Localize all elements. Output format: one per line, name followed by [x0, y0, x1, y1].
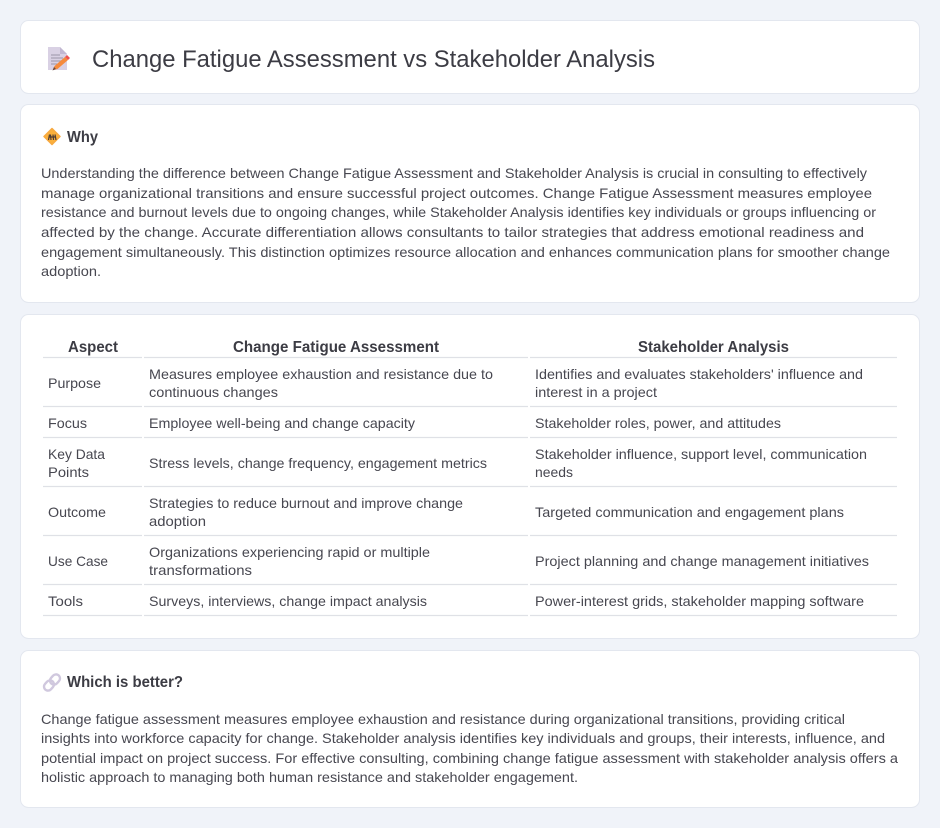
row: purpose: interest in a project: [535, 384, 657, 400]
table header row: Change Fatigue Assessment: [233, 339, 440, 356]
row: purpose: continuous changes: [149, 384, 278, 400]
row: outcome: adoption: [149, 513, 206, 529]
row: purpose: Purpose: [48, 375, 101, 391]
text block: why paragraph: [41, 165, 890, 279]
text block: verdict paragraph: holistic approach to managing both human resistance and stakeholder engagement.: [41, 769, 578, 785]
text block: why paragraph: affected by the change. Accurate differentiation allows consultants to tailor strategies that address emotional readiness and: [41, 224, 864, 240]
title: Change Fatigue Assessment vs Stakeholder Analysis: [92, 46, 655, 73]
row: tools: [48, 593, 864, 609]
row: key data points: Stress levels, change frequency, engagement metrics: [149, 455, 487, 471]
row: key data points: Stakeholder influence, support level, communication: [535, 446, 867, 462]
text block: verdict paragraph: Change fatigue assessment measures employee exhaustion and resistance during organizational transitions, providing critical: [41, 711, 845, 727]
panel: which is better: [20, 650, 920, 808]
row: key data points: Points: [48, 464, 89, 480]
table header row: Aspect: [68, 339, 119, 356]
row: key data points: [48, 446, 867, 480]
text block: verdict paragraph: [41, 711, 898, 785]
row: use case: transformations: [149, 562, 252, 578]
row: outcome: Outcome: [48, 504, 106, 520]
text block: why paragraph: resistance and burnout levels due to ongoing changes, while Stakeholder Analysis identifies key individuals or groups influencing or: [41, 204, 876, 220]
row: focus: Focus: [48, 415, 87, 431]
row: tools: Tools: [48, 593, 83, 609]
row: key data points: Key Data: [48, 446, 105, 462]
panel: why: [20, 104, 920, 302]
row: focus: Employee well-being and change capacity: [149, 415, 415, 431]
row: purpose: [48, 366, 863, 400]
row: outcome: [48, 495, 844, 529]
row: use case: Use Case: [48, 553, 108, 569]
row: outcome: Strategies to reduce burnout and improve change: [149, 495, 463, 511]
row: use case: Organizations experiencing rapid or multiple: [149, 544, 430, 560]
row: outcome: Targeted communication and engagement plans: [535, 504, 844, 520]
row: use case: Project planning and change management initiatives: [535, 553, 869, 569]
icon: diamond sign: [44, 128, 60, 144]
panel: comparison table: [20, 314, 920, 638]
text block: why paragraph: Understanding the difference between Change Fatigue Assessment and Stakeholder Analysis is crucial in consulting to effectively: [41, 165, 867, 181]
panel: header: [20, 20, 920, 94]
table header row: Stakeholder Analysis: [638, 339, 789, 356]
heading: why: Why: [67, 129, 98, 146]
row: focus: [48, 415, 781, 431]
text block: why paragraph: engagement simultaneously. This distinction optimizes resource allocation and enhances communication plans for smoother change: [41, 244, 890, 260]
row: tools: Surveys, interviews, change impact analysis: [149, 593, 427, 609]
text block: verdict paragraph: insights into workforce capacity for change. Stakeholder analysis identifies key individuals and groups, their interests, influence, and: [41, 730, 885, 746]
row: tools: Power-interest grids, stakeholder mapping software: [535, 593, 864, 609]
icon: document with pencil: [48, 47, 70, 70]
row: key data points: needs: [535, 464, 573, 480]
text block: why paragraph: adoption.: [41, 263, 101, 279]
table header row: [68, 339, 789, 356]
heading: which is better: Which is better?: [67, 674, 183, 691]
row: use case: [48, 544, 869, 578]
row: focus: Stakeholder roles, power, and attitudes: [535, 415, 781, 431]
icon: link: [42, 673, 62, 692]
text block: verdict paragraph: potential impact on project success. For effective consulting, combining change fatigue assessment with stakeholder analysis offers a: [41, 750, 898, 766]
text block: why paragraph: manage organizational transitions and ensure successful project outcomes. Change Fatigue Assessment measures employee: [41, 185, 872, 201]
row: purpose: Identifies and evaluates stakeholders' influence and: [535, 366, 863, 382]
row: purpose: Measures employee exhaustion and resistance due to: [149, 366, 493, 382]
